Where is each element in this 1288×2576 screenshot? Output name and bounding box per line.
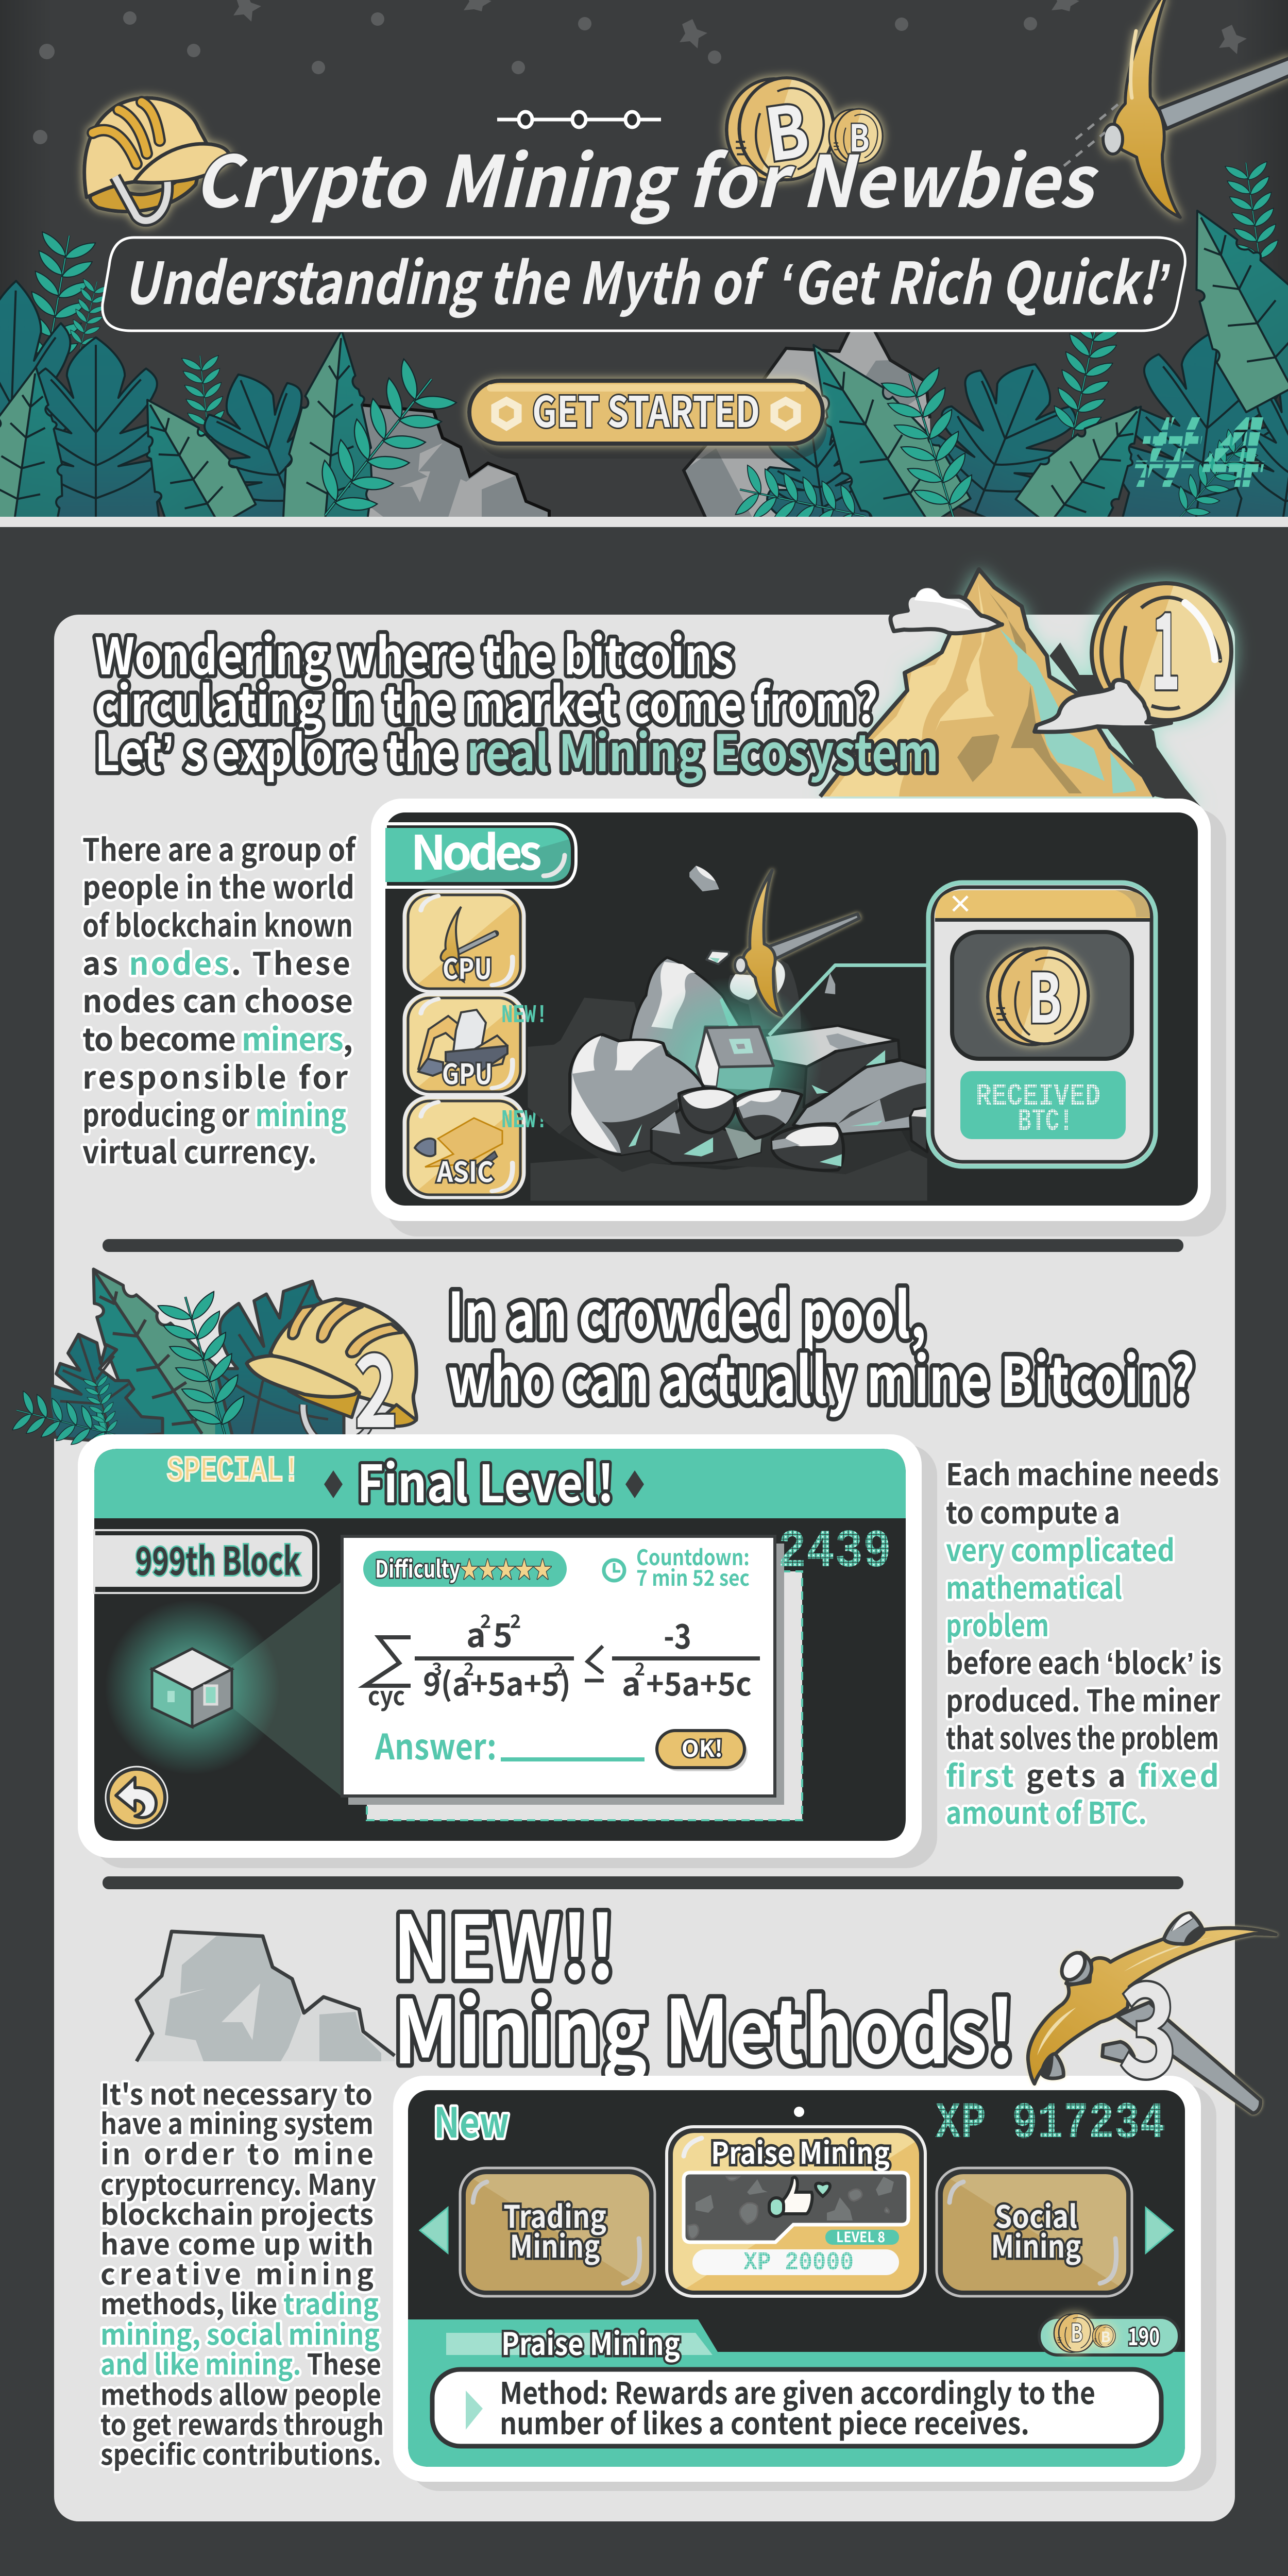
card: trading mining: Mining	[510, 2222, 600, 2267]
section 1 mountain illustration: 1	[1151, 567, 1180, 720]
paragraph: block problem: that solves the problem	[946, 1715, 1219, 1758]
countdown: Countdown:	[636, 1540, 750, 1572]
card: CPU: CPU	[443, 946, 492, 987]
paragraph: block problem: mathematical	[946, 1564, 1122, 1607]
panel: nodes game screen	[371, 799, 1226, 1236]
paragraph: mining methods: specific contributions.	[100, 2432, 381, 2473]
paragraph: nodes: nodes can choose	[82, 977, 353, 1022]
method description: Method: Rewards are given accordingly to the	[500, 2369, 1095, 2413]
icon: header pickaxe	[1103, 0, 1288, 217]
final level title: Final Level!	[357, 1443, 614, 1517]
coin balance: 190	[1128, 2318, 1160, 2352]
paragraph: mining methods: It's not necessary to	[100, 2072, 372, 2113]
formula	[365, 1607, 760, 1713]
heading: section 1: Let’ s explore the real Mining Ecosystem	[95, 713, 939, 786]
window: received BTC: BTC!	[1018, 1105, 1073, 1140]
card: trading mining	[460, 2168, 655, 2296]
leaf and fern over rock	[282, 332, 457, 517]
card: praise mining: Praise Mining	[711, 2129, 890, 2173]
paragraph: nodes	[82, 825, 357, 1173]
rock pile with block	[528, 866, 930, 1201]
paragraph: nodes: to become miners,	[82, 1015, 353, 1060]
title: Crypto Mining for Newbies	[194, 125, 1099, 228]
paragraph: nodes: of blockchain known	[82, 901, 353, 946]
paragraph: block problem: to compute a	[946, 1489, 1120, 1532]
section 1 mountain illustration	[820, 567, 1231, 806]
paragraph: block problem: amount of BTC.	[946, 1789, 1147, 1833]
window: received BTC	[928, 883, 1156, 1166]
formula: -3	[664, 1609, 691, 1659]
section 3 rock	[137, 1931, 395, 2061]
rock left	[355, 405, 549, 517]
panel: mining methods game screen	[393, 2076, 1216, 2491]
icon: header bitcoin coins: B	[758, 73, 815, 182]
button: get started	[469, 378, 827, 459]
method description	[432, 2369, 1161, 2446]
tab: praise mining: Praise Mining	[501, 2319, 680, 2364]
subtitle box: Understanding the Myth of ‘Get Rich Quick!’	[124, 238, 1171, 321]
coin rim marks	[1122, 598, 1221, 709]
method description: number of likes a content piece receives.	[500, 2400, 1029, 2443]
paragraph: mining methods: have a mining system	[100, 2101, 374, 2142]
back button	[106, 1767, 167, 1828]
block label	[94, 1530, 318, 1593]
formula: a	[466, 1609, 486, 1657]
card: social mining: Mining	[991, 2222, 1081, 2267]
paragraph: nodes: There are a group of	[82, 825, 357, 870]
paragraph: nodes: people in the world	[82, 863, 354, 908]
paragraph: nodes: producing or mining	[82, 1091, 346, 1136]
card: social mining: Social	[995, 2192, 1077, 2237]
block label: 999th Block	[135, 1531, 300, 1586]
icon: header bitcoin coins	[726, 73, 883, 182]
heading: section 2: In an crowded pool,	[448, 1265, 926, 1357]
paragraph: mining methods: creative mining	[100, 2251, 374, 2293]
pickaxe in rock	[735, 870, 859, 1015]
arrow right	[1146, 2208, 1173, 2253]
formula: 3	[432, 1655, 442, 1681]
formula: a	[622, 1658, 641, 1705]
nodes tab	[385, 815, 576, 887]
paragraph: mining methods: to get rewards through	[100, 2402, 384, 2443]
card: ASIC	[404, 1097, 548, 1197]
paragraph: block problem: problem	[946, 1602, 1049, 1645]
panel: final level game screen	[78, 1434, 937, 1868]
paragraph: mining methods: in order to mine	[100, 2131, 374, 2173]
paragraph: mining methods: mining, social mining	[100, 2312, 380, 2353]
formula: 2	[480, 1607, 491, 1634]
icon: header bitcoin coins: B	[849, 108, 870, 162]
heading: section 1: Wondering where the bitcoins	[95, 616, 734, 689]
card: GPU	[404, 994, 548, 1094]
window: received BTC: RECEIVED	[976, 1079, 1100, 1114]
button: get started: GET STARTED	[532, 378, 760, 439]
foliage right	[735, 160, 1288, 552]
paragraph: mining methods: and like mining. These	[100, 2342, 381, 2383]
icon: helmet	[84, 98, 229, 221]
formula: 9(a+5a+5)	[423, 1658, 571, 1705]
three-dot ornament	[497, 112, 661, 127]
window: received BTC: B	[1028, 944, 1062, 1043]
paragraph: block problem: first gets a fixed	[946, 1752, 1219, 1795]
paragraph: mining methods	[100, 2072, 384, 2473]
paragraph: nodes: virtual currency.	[82, 1128, 317, 1173]
icon: glowing block	[105, 1600, 280, 1775]
card: ASIC: ASIC	[436, 1149, 494, 1190]
rock right	[684, 331, 933, 517]
heading: section 3	[393, 1877, 1015, 2089]
formula: cyc	[368, 1676, 405, 1713]
formula: 2	[553, 1655, 564, 1681]
heading: section 3: Mining Methods!	[393, 1962, 1015, 2089]
ok button: OK!	[682, 1731, 723, 1764]
motion lines	[1064, 104, 1119, 166]
paragraph: mining methods: blockchain projects	[100, 2192, 374, 2233]
numeral 3: 3	[1120, 1927, 1177, 2114]
main panel	[54, 615, 1235, 2521]
paragraph: mining methods: methods allow people	[100, 2372, 381, 2413]
foliage left	[0, 231, 303, 517]
countdown	[604, 1540, 750, 1592]
pixel xp total: XP 917234	[935, 2095, 1165, 2154]
difficulty pill	[363, 1551, 567, 1587]
formula: 5	[493, 1609, 513, 1657]
pixel score: 2439	[778, 1522, 891, 1583]
heading: section 1	[95, 616, 939, 786]
window: received BTC: ×	[948, 884, 973, 920]
issue number pixel text: #4	[1133, 399, 1268, 519]
icon: helmet 2	[247, 1299, 416, 1446]
paragraph: nodes: as nodes. These	[82, 939, 350, 984]
coin balance	[1039, 2313, 1179, 2355]
paragraph: block problem: very complicated	[946, 1527, 1175, 1570]
card: CPU	[404, 891, 524, 991]
card: praise mining: LEVEL 8	[836, 2226, 885, 2247]
pager dot	[794, 2107, 804, 2117]
white strip	[0, 517, 1288, 527]
night sky dots and stars	[33, 0, 1247, 144]
card: GPU: GPU	[442, 1052, 493, 1092]
paragraph: mining methods: have come up with	[100, 2222, 374, 2263]
paragraph: block problem: produced. The miner	[946, 1677, 1221, 1720]
section 2 foliage	[12, 1269, 344, 1454]
header banner	[0, 0, 1288, 552]
paragraph: block problem	[946, 1451, 1222, 1833]
coin balance: B	[1100, 2326, 1111, 2347]
cloud top	[890, 586, 1002, 633]
answer line	[375, 1719, 645, 1770]
formula: +5a+5c	[646, 1658, 752, 1705]
icon: section 3 pickaxe	[1028, 1913, 1276, 2113]
difficulty pill: Difficulty	[375, 1551, 460, 1585]
formula: 2	[464, 1655, 474, 1681]
formula: 2	[510, 1607, 521, 1634]
card: GPU: NEW!	[501, 1001, 548, 1030]
answer line: Answer:	[375, 1719, 497, 1770]
heading: section 1: circulating in the market come from?	[95, 665, 878, 738]
numeral 2: 2	[354, 1311, 398, 1456]
heading: section 3: NEW!!	[393, 1877, 616, 2004]
paragraph: block problem: Each machine needs	[946, 1451, 1219, 1494]
countdown: 7 min 52 sec	[636, 1561, 750, 1592]
ok button	[657, 1731, 748, 1771]
card: trading mining: Trading	[503, 2192, 606, 2237]
difficulty pill: ★★★★★	[460, 1551, 552, 1584]
arrow left	[420, 2208, 448, 2253]
like icon	[769, 2177, 830, 2216]
special tag: SPECIAL!	[167, 1451, 300, 1492]
card: social mining	[937, 2168, 1132, 2296]
light cone	[227, 1582, 341, 1796]
divider	[103, 1239, 1183, 1252]
paragraph: nodes: responsible for	[82, 1053, 348, 1098]
paragraph: block problem: before each ‘block’ is	[946, 1639, 1222, 1683]
nodes tab: Nodes	[411, 815, 542, 884]
formula: 2	[635, 1655, 645, 1681]
pixel new label: New	[434, 2090, 509, 2150]
card: praise mining: XP 20000	[743, 2248, 854, 2278]
paragraph: mining methods: methods, like trading	[100, 2281, 379, 2323]
question paper	[342, 1536, 802, 1820]
card: praise mining	[667, 2127, 925, 2296]
card: ASIC: NEW!	[501, 1106, 548, 1136]
heading: section 2	[448, 1265, 1195, 1421]
divider	[103, 1876, 1183, 1889]
paragraph: mining methods: cryptocurrency. Many	[100, 2162, 376, 2203]
cloud bottom	[1035, 680, 1171, 732]
coin balance: B	[1071, 2313, 1083, 2349]
